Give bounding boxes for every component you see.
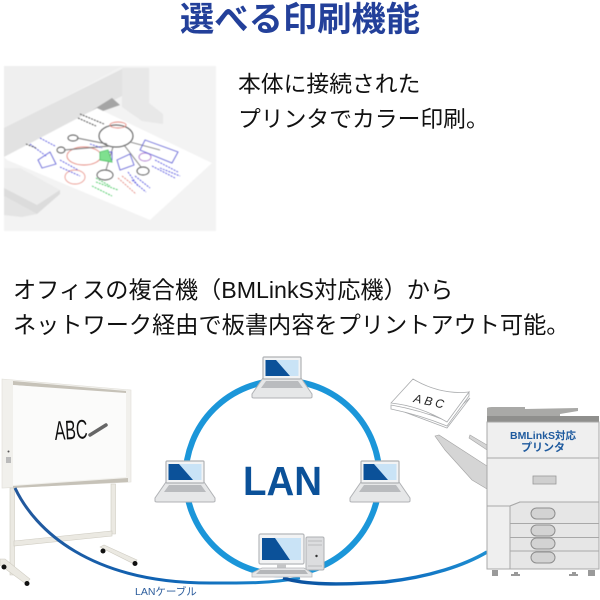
photo: printer output: [4, 66, 216, 231]
text block: network printing: オフィスの複合機（BMLinkS対応機）から: [13, 277, 453, 303]
icon: desktop computer: [252, 534, 324, 577]
icon: laptop top: [252, 357, 312, 398]
body: [487, 422, 599, 569]
cable: printer to hub: [283, 552, 487, 584]
text block: network printing: ネットワーク経由で板書内容をプリントアウト可能。: [13, 312, 570, 338]
cable: whiteboard to hub: [15, 488, 300, 583]
stand: [10, 484, 116, 575]
LAN label: LAN: [243, 458, 322, 504]
output trays: [469, 435, 487, 450]
handwritten ABC: ABC: [54, 414, 88, 446]
text block: network printing: [13, 277, 570, 338]
icon: printed paper: [391, 379, 470, 428]
text block: built-in printer: [238, 71, 489, 132]
pen: [90, 425, 106, 435]
text block: built-in printer: プリンタでカラー印刷。: [238, 106, 489, 132]
printer label: BMLinkS対応: [510, 429, 576, 442]
icon: laptop right: [350, 461, 410, 502]
cable label: LANケーブル: [135, 585, 197, 598]
tray handles: [531, 508, 555, 519]
printer: [435, 407, 599, 576]
panel: [533, 476, 556, 484]
feet: [492, 570, 595, 576]
text block: built-in printer: 本体に接続された: [238, 71, 420, 97]
scanner lid: [487, 407, 599, 422]
icon: laptop left: [155, 461, 215, 502]
mind map doodles: [26, 114, 180, 196]
icon: printed paper: ABC: [411, 391, 448, 412]
printer: プリンタ: [521, 441, 565, 454]
whiteboard: [0, 379, 138, 586]
board surface: [13, 385, 126, 485]
board frame: [2, 379, 131, 488]
network ring: [186, 380, 380, 574]
title: 選べる印刷機能: [180, 1, 420, 39]
